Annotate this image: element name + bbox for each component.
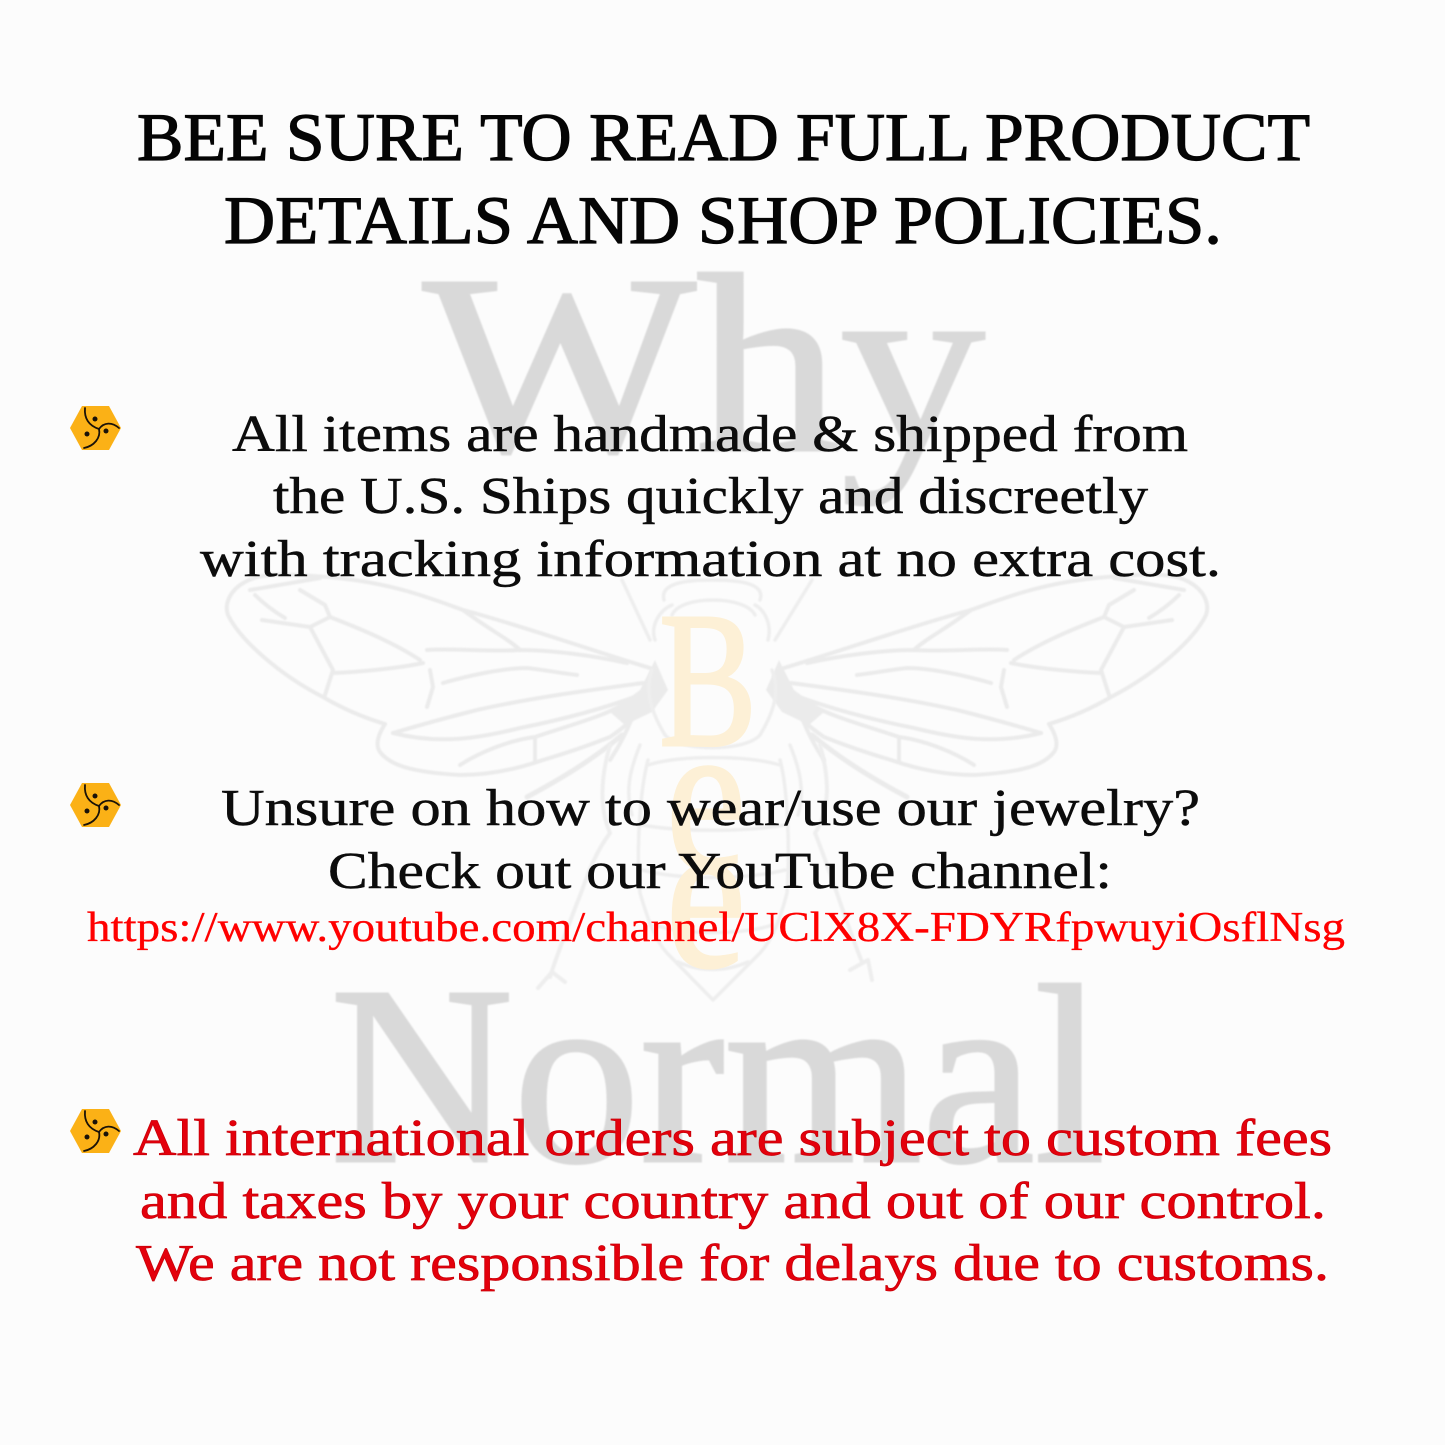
text block: international orders notice: and taxes by your country and out of our control.: [140, 1173, 1326, 1230]
watermark letter: e upper: e: [666, 676, 746, 915]
title: DETAILS AND SHOP POLICIES.: [224, 182, 1222, 258]
icon: hexagon bullet 3: [70, 1109, 121, 1153]
text block: YouTube channel: Unsure on how to wear/use our jewelry?: [221, 780, 1200, 837]
text block: shipping information: the U.S. Ships quickly and discreetly: [273, 468, 1148, 525]
text block: shipping information: [200, 406, 1221, 588]
text block: YouTube channel: [87, 780, 1345, 951]
icon: right wings: [766, 575, 1207, 797]
title: BEE SURE TO READ FULL PRODUCT: [137, 99, 1310, 175]
watermark word: Normal: Normal: [330, 935, 1105, 1217]
icon: bee body: [538, 580, 872, 1000]
title: [137, 99, 1310, 258]
text block: shipping information: with tracking information at no extra cost.: [200, 531, 1221, 588]
text block: international orders notice: All international orders are subject to custom fees: [133, 1110, 1332, 1167]
text block: YouTube channel: https://www.youtube.com/channel/UClX8X-FDYRfpwuyiOsflNsg: [87, 905, 1345, 951]
text block: international orders notice: [133, 1110, 1332, 1292]
text block: YouTube channel: Check out our YouTube channel:: [328, 843, 1112, 900]
icon: hexagon bullet 2: [70, 783, 121, 827]
text block: shipping information: All items are handmade & shipped from: [232, 406, 1188, 463]
icon: left wings: [227, 575, 668, 797]
watermark letter: B: B: [659, 572, 757, 787]
text block: international orders notice: We are not responsible for delays due to customs.: [136, 1235, 1329, 1292]
icon: hexagon bullet 1: [70, 406, 121, 450]
watermark letter: e lower: e: [666, 774, 746, 1013]
watermark word: Why: Why: [423, 224, 985, 506]
watermark: bee illustration: [227, 224, 1207, 1217]
